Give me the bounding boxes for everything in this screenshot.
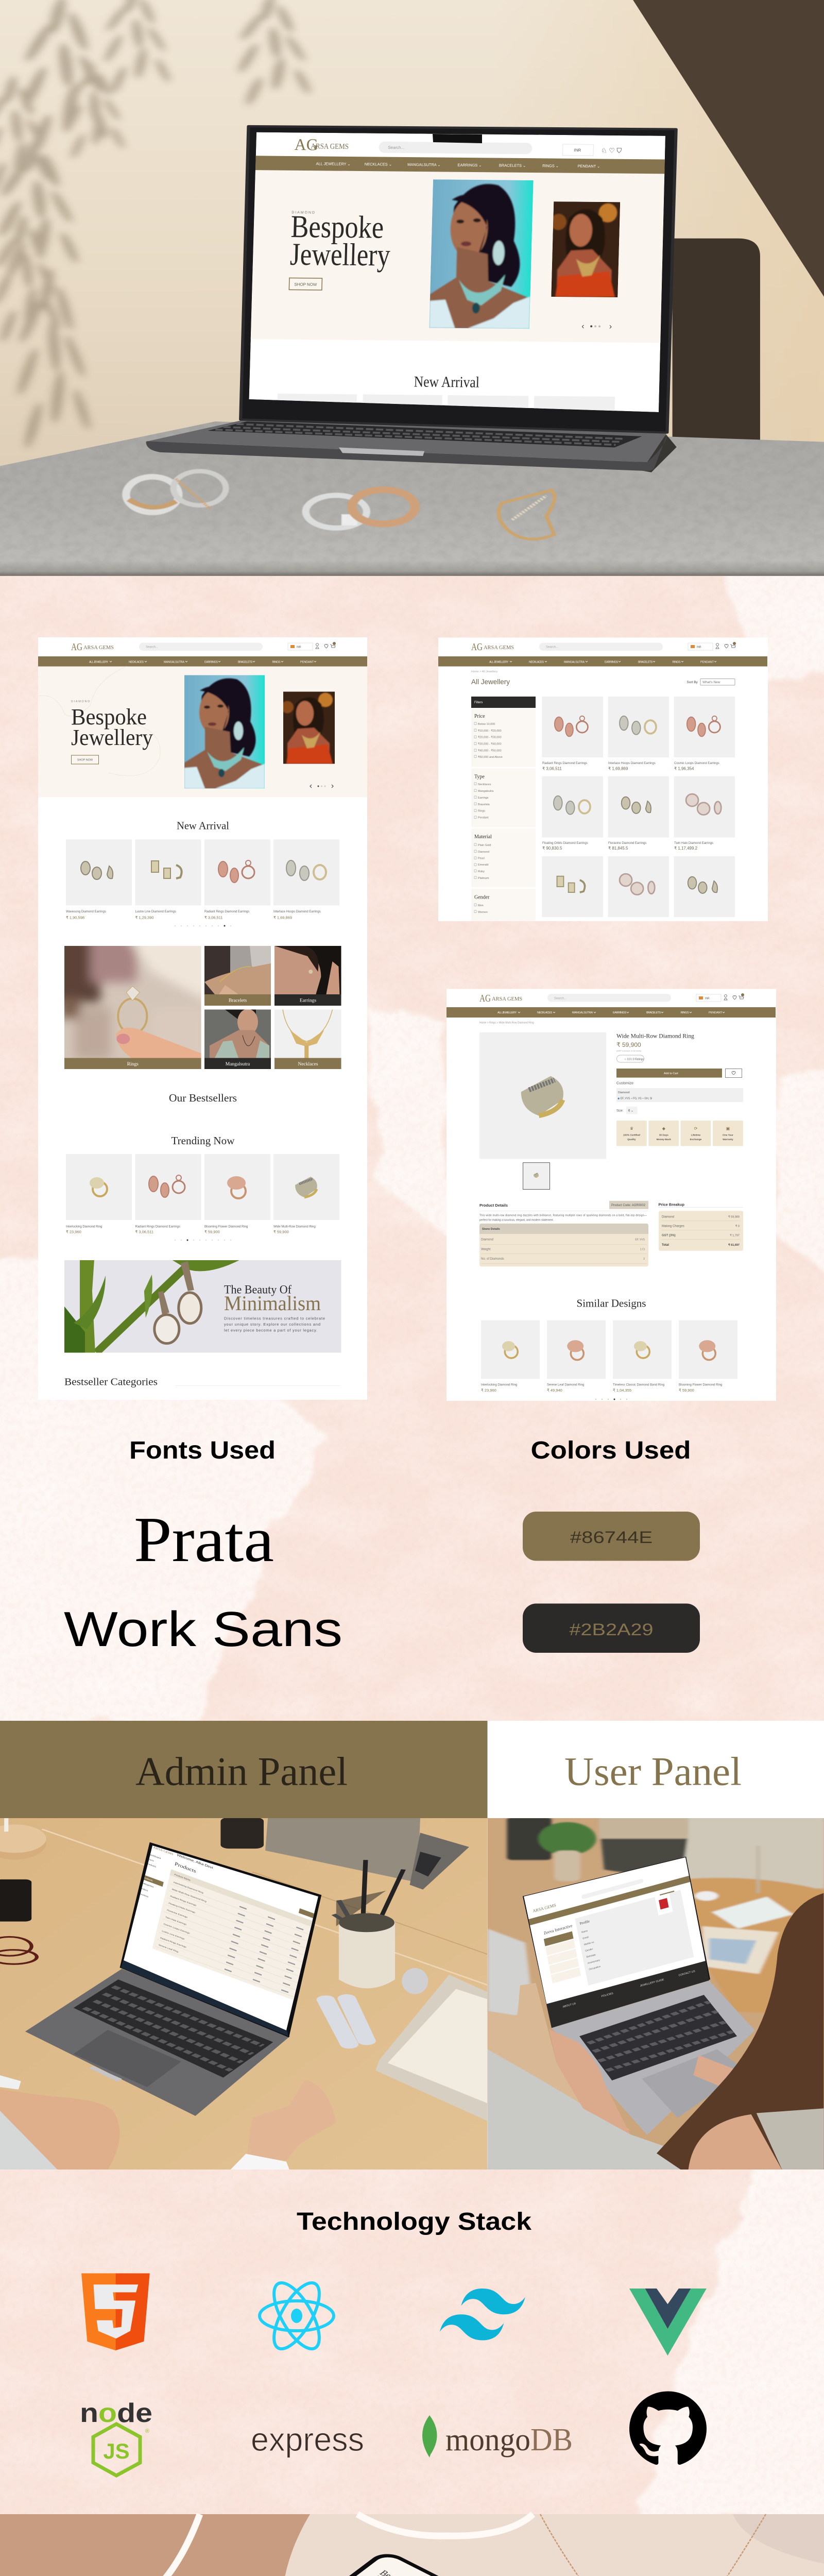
listing product grid: Cosmic Loops Diamond Earrings bbox=[674, 762, 719, 765]
new arrival products: ₹ 1,29,390 bbox=[135, 915, 154, 920]
heading: colors used: Colors Used bbox=[530, 1437, 691, 1464]
filter sidebar: Pearl bbox=[478, 857, 485, 860]
minimalism banner: Discover timeless treasures crafted to celebrate bbox=[224, 1316, 325, 1321]
logo: Node.js bbox=[80, 2398, 152, 2476]
site header: INR bbox=[297, 646, 301, 649]
filter sidebar: Type bbox=[474, 774, 485, 780]
site header: MANGALSUTRA bbox=[572, 1011, 593, 1014]
product purchase panel: Quality bbox=[627, 1138, 636, 1141]
site header: AG bbox=[71, 641, 82, 653]
similar designs heading: Similar Designs bbox=[577, 1297, 646, 1310]
logo: GitHub bbox=[629, 2392, 707, 2465]
similar designs products: Interlocking Diamond Ring bbox=[481, 1384, 517, 1387]
site header: BRACELETS bbox=[238, 660, 252, 664]
product details table: Product Details bbox=[479, 1203, 508, 1208]
laptop screen: website home: NECKLACES ⌄ bbox=[365, 162, 392, 167]
user screen content: Email bbox=[582, 1936, 589, 1940]
laptop screen: website home: INR bbox=[574, 148, 581, 152]
trending products: Wide Multi-Row Diamond Ring bbox=[273, 1225, 316, 1228]
breadcrumb and title: Home > All Jewellery bbox=[471, 670, 497, 673]
user screen content: Gender bbox=[585, 1947, 593, 1952]
product details table: Product Code: AGR0002 bbox=[611, 1204, 646, 1207]
minimalism banner: let every piece become a part of your legacy. bbox=[224, 1328, 317, 1332]
product purchase panel: ◉ EF, VVS ○ FG, VS ○ GH, SI bbox=[617, 1097, 652, 1100]
product purchase panel: Wide Multi-Row Diamond Ring bbox=[616, 1033, 694, 1040]
filter sidebar: ₹50,000 and Above bbox=[478, 755, 503, 759]
page background: watercolour bbox=[0, 567, 824, 2519]
laptop screen: website home: ARSA GEMS bbox=[311, 142, 349, 151]
site header bbox=[38, 641, 367, 667]
filter sidebar: Earrings bbox=[478, 796, 489, 800]
product purchase panel: 6 ⌄ bbox=[628, 1110, 633, 1113]
font sample: Prata: Prata bbox=[134, 1504, 274, 1575]
price breakup table: Making Charges bbox=[662, 1225, 684, 1228]
minimalism banner: The Beauty Of bbox=[224, 1283, 291, 1296]
logo: Node.js: ® bbox=[145, 2428, 149, 2434]
admin screen content: Products bbox=[174, 1861, 197, 1874]
filter sidebar: Emerald bbox=[478, 863, 488, 867]
hero banner: SHOP NOW bbox=[77, 758, 93, 761]
logo: Node.js: JS bbox=[103, 2439, 130, 2463]
similar designs products: ₹ 49,940 bbox=[547, 1388, 562, 1393]
admin screen content: Interlocking Diamond Ring bbox=[174, 1881, 204, 1894]
listing product grid: ₹ 90,830.5 bbox=[542, 846, 562, 851]
laptop screen: website home: ‹ bbox=[581, 322, 585, 331]
admin screen content: Twin Halo Earrings bbox=[165, 1916, 187, 1926]
font sample: Work Sans: Work Sans bbox=[64, 1602, 342, 1657]
product details table: EF, VVS bbox=[635, 1239, 645, 1242]
admin screen content: Product Name bbox=[174, 1873, 191, 1882]
new arrival products: ₹ 1,90,598 bbox=[66, 915, 84, 920]
logo: React bbox=[260, 2276, 334, 2355]
minimalism banner: your unique story. Explore our collections and bbox=[224, 1322, 320, 1327]
similar designs products bbox=[481, 1320, 737, 1400]
new arrival products: Radiant Rings Diamond Earrings bbox=[204, 910, 249, 913]
filter sidebar: ₹40,000 - ₹50,000 bbox=[478, 749, 502, 752]
site header: ARSA GEMS bbox=[492, 996, 522, 1002]
price breakup table: Price Breakup bbox=[658, 1202, 684, 1207]
filter sidebar: Ruby bbox=[478, 870, 485, 873]
user screen content: Name bbox=[581, 1929, 588, 1934]
product purchase panel: ₹ 59,900 bbox=[616, 1041, 641, 1048]
admin screen content: Products bbox=[143, 1876, 153, 1882]
site header: AG bbox=[479, 993, 491, 1004]
product purchase panel: One Year bbox=[723, 1133, 733, 1137]
admin screen content: Categories bbox=[141, 1882, 154, 1888]
filter sidebar: Rings bbox=[478, 810, 485, 813]
similar designs products: Timeless Classic Diamond Band Ring bbox=[613, 1384, 664, 1387]
product details table bbox=[479, 1201, 648, 1266]
logo: MongoDB: DB bbox=[530, 2422, 573, 2458]
site header: ARSA GEMS bbox=[83, 645, 114, 651]
laptop screen: website home: PENDANT ⌄ bbox=[578, 164, 600, 168]
breadcrumb and title: Sort By bbox=[687, 681, 698, 684]
user screen content: Birthdate bbox=[586, 1953, 596, 1958]
trending products: Blooming Flower Diamond Ring bbox=[204, 1225, 248, 1228]
site header: ALL JEWELLERY bbox=[497, 1011, 517, 1014]
minimalism banner bbox=[64, 1260, 341, 1353]
product purchase panel: Diamond: bbox=[618, 1091, 630, 1094]
user screen content: Zeeva Interactive bbox=[543, 1923, 573, 1936]
new arrival products: Interlace Hoops Diamond Earrings bbox=[273, 910, 321, 913]
new arrival products: ₹ 3,06,511 bbox=[204, 915, 222, 920]
breadcrumb and title bbox=[471, 670, 735, 686]
site header: BRACELETS bbox=[646, 1011, 661, 1014]
product purchase panel: Size: bbox=[616, 1110, 624, 1113]
site header: RINGS bbox=[673, 660, 681, 664]
price breakup table: ₹ 0 bbox=[735, 1224, 740, 1228]
phone mockup with website bbox=[159, 2546, 516, 2576]
site header: INR bbox=[697, 646, 701, 649]
filter sidebar: Women bbox=[478, 911, 488, 914]
breadcrumb and title: What's New bbox=[702, 681, 720, 684]
admin screen content: Dashboard bbox=[148, 1853, 161, 1859]
site header: RINGS bbox=[681, 1011, 689, 1014]
product details table: 2 bbox=[643, 1258, 645, 1261]
site header: MANGALSUTRA bbox=[564, 660, 585, 664]
laptop screen: website home: SHOP NOW bbox=[294, 282, 317, 287]
site header: NECKLACES bbox=[529, 660, 544, 664]
hero banner: Jewellery bbox=[71, 725, 153, 750]
filter sidebar: ₹10,000 - ₹20,000 bbox=[478, 729, 502, 733]
filter sidebar: Pendant bbox=[478, 816, 489, 819]
product purchase panel: (MRP Inclusive of all taxes) bbox=[616, 1049, 642, 1052]
website mockup: product detail bbox=[447, 989, 776, 1401]
product details table: perfect for making a luxurious, elegant, and modern statement. bbox=[479, 1219, 554, 1222]
site header: AG bbox=[471, 641, 483, 653]
logo: Vue bbox=[629, 2289, 707, 2355]
logo: Tailwind CSS bbox=[440, 2289, 525, 2340]
similar designs products: ₹ 23,960 bbox=[481, 1388, 496, 1393]
price breakup table: ₹ 1,797 bbox=[730, 1233, 740, 1238]
product purchase panel: Add to Cart bbox=[664, 1072, 678, 1075]
laptop screen: website home: RINGS ⌄ bbox=[542, 163, 559, 168]
website mockup: all jewellery listing bbox=[438, 638, 768, 921]
product purchase panel: 100% Certified bbox=[623, 1133, 640, 1137]
site header: Search... bbox=[546, 646, 558, 649]
category grid: Mangalsutra bbox=[226, 1062, 250, 1067]
category grid: Earrings bbox=[300, 998, 316, 1004]
listing product grid: Radiant Rings Diamond Earrings bbox=[542, 762, 587, 765]
laptop screen: website home: ALL JEWELLERY ⌄ bbox=[316, 161, 351, 166]
laptop screen: website home: ♘ ♡ ⛉ bbox=[601, 146, 622, 155]
user screen content: ARSA GEMS bbox=[533, 1903, 557, 1913]
hero banner: Bespoke bbox=[71, 704, 147, 730]
person and sofa bbox=[488, 1983, 735, 2171]
admin screen content: ARSA GEMS bbox=[153, 1846, 174, 1856]
band: admin panel title: Admin Panel bbox=[135, 1749, 348, 1794]
product purchase panel: Money-Back bbox=[657, 1138, 671, 1141]
hero banner bbox=[38, 667, 367, 798]
table bbox=[0, 421, 824, 576]
product gallery bbox=[479, 1032, 606, 1190]
price breakup table: ₹ 61,697 bbox=[728, 1243, 740, 1247]
laptop screen: website home: Jewellery bbox=[289, 237, 391, 273]
product purchase panel: Lifetime bbox=[691, 1133, 701, 1137]
product purchase panel: ⟳ bbox=[694, 1126, 698, 1131]
wall and shadows bbox=[0, 0, 824, 576]
colour swatch #2B2A29 bbox=[523, 1603, 700, 1653]
listing product grid: ₹ 1,96,354 bbox=[674, 767, 694, 771]
new arrival products bbox=[66, 839, 339, 926]
hero photo: laptop on stone table bbox=[0, 0, 824, 576]
listing product grid: ₹ 1,69,869 bbox=[608, 767, 628, 771]
filter sidebar bbox=[471, 697, 536, 921]
site header: PENDANT bbox=[300, 660, 314, 664]
product details table: Diamond bbox=[481, 1239, 493, 1242]
similar designs products: Serene Leaf Diamond Ring bbox=[547, 1384, 584, 1387]
trending products: ₹ 59,900 bbox=[204, 1229, 220, 1234]
site header: PENDANT bbox=[709, 1011, 723, 1014]
site header: EARRINGS bbox=[613, 1011, 626, 1014]
admin screen content: Lustre Line Earrings bbox=[162, 1930, 185, 1940]
band: user panel title: User Panel bbox=[564, 1749, 742, 1794]
trending products bbox=[66, 1154, 339, 1241]
new arrival products: Wavesong Diamond Earrings bbox=[66, 910, 106, 913]
site header: Search... bbox=[146, 646, 158, 649]
product purchase panel: Exchange bbox=[690, 1138, 702, 1141]
listing product grid: ₹ 81,845.5 bbox=[608, 846, 628, 851]
laptop screen: website home: BRACELETS ⌄ bbox=[499, 163, 526, 168]
price breakup table: ₹ 59,900 bbox=[728, 1215, 740, 1219]
admin screen content: Radiant Rings Earrings bbox=[160, 1937, 187, 1948]
user screen content: ABOUT US bbox=[562, 2002, 576, 2009]
site header bbox=[438, 641, 767, 667]
filter sidebar: ₹30,000 - ₹40,000 bbox=[478, 742, 502, 746]
photo: user panel on laptop on lap bbox=[488, 1818, 824, 2171]
new arrival heading: New Arrival bbox=[177, 819, 229, 832]
listing product grid: Twin Halo Diamond Earrings bbox=[674, 842, 713, 845]
listing product grid: Interlace Hoops Diamond Earrings bbox=[608, 762, 656, 765]
trending products: Interlocking Diamond Ring bbox=[66, 1225, 102, 1228]
filter sidebar: Material bbox=[474, 834, 492, 840]
filter sidebar: Men bbox=[478, 904, 484, 907]
user screen content: JEWELLERY GUIDE bbox=[640, 1978, 665, 1988]
admin screen content: Floravine Earrings bbox=[167, 1909, 188, 1919]
webcam notch bbox=[433, 134, 482, 143]
website mockup: home page bbox=[38, 637, 367, 1400]
logo: HTML5 bbox=[81, 2274, 150, 2350]
admin screen content: Reviews bbox=[139, 1892, 149, 1898]
minimalism banner: Minimalism bbox=[224, 1292, 321, 1315]
trending products: Radiant Rings Diamond Earrings bbox=[135, 1225, 180, 1228]
trending products: ₹ 59,900 bbox=[273, 1229, 289, 1234]
user screen content: Mobile no bbox=[583, 1941, 594, 1946]
admin screen content: Cosmic Loops Earrings bbox=[163, 1923, 191, 1935]
site header: RINGS bbox=[272, 660, 281, 664]
listing product grid: ₹ 3,06,511 bbox=[542, 767, 562, 771]
admin screen content: Wide Multi-Row Diamond Ring bbox=[171, 1888, 207, 1903]
product details table: 1 Ct bbox=[640, 1248, 645, 1251]
laptop screen: website home: Bespoke bbox=[290, 209, 384, 245]
similar designs products: ₹ 59,900 bbox=[679, 1388, 694, 1393]
laptop body bbox=[146, 126, 677, 472]
listing product grid: ₹ 1,17,499.2 bbox=[674, 846, 698, 851]
site header: EARRINGS bbox=[204, 660, 218, 664]
necklace with pendant bbox=[540, 2514, 766, 2576]
logo: Express: express bbox=[251, 2421, 364, 2458]
product details table: Weight bbox=[481, 1248, 491, 1251]
filter sidebar: Bracelets bbox=[478, 803, 490, 806]
price breakup table bbox=[658, 1202, 743, 1251]
site header: PENDANT bbox=[700, 660, 714, 664]
filter sidebar: Necklaces bbox=[478, 783, 491, 786]
site header: ARSA GEMS bbox=[484, 645, 514, 651]
user screen content: Occupation bbox=[589, 1965, 601, 1971]
product details table: Stone Details bbox=[482, 1228, 500, 1231]
band: user panel title bbox=[487, 1721, 824, 1819]
laptop screen: website home: Search... bbox=[388, 145, 404, 150]
hero banner: DIAMOND bbox=[71, 700, 91, 703]
admin screen content: Radiant Rings Earrings bbox=[170, 1895, 197, 1907]
site header: NECKLACES bbox=[537, 1011, 552, 1014]
our bestsellers heading: Our Bestsellers bbox=[169, 1092, 237, 1104]
trending now heading: Trending Now bbox=[171, 1134, 235, 1147]
product details table: No. of Diamonds bbox=[481, 1258, 504, 1261]
desk objects bbox=[0, 1818, 489, 2122]
laptop deck bbox=[25, 1842, 321, 2116]
product purchase panel: ▣ bbox=[726, 1126, 730, 1131]
product purchase panel: Warranty bbox=[723, 1138, 733, 1141]
breadcrumb: Home > Rings > Wide Multi-Row Diamond Ring bbox=[479, 1021, 534, 1024]
user screen content: Profile bbox=[579, 1919, 590, 1926]
site header: Search... bbox=[554, 997, 566, 1001]
logo: Node.js: node bbox=[80, 2398, 152, 2428]
product purchase panel bbox=[616, 1033, 743, 1146]
laptop screen: website home: MANGALSUTRA ⌄ bbox=[407, 162, 441, 167]
product purchase panel: ☆ 0.0 | 0 Ratings bbox=[624, 1058, 644, 1061]
colour swatch #2B2A29: #2B2A29 bbox=[570, 1620, 653, 1639]
admin screen content: Floating Orbits Earrings bbox=[168, 1902, 196, 1914]
laptop screen: website home: EARRINGS ⌄ bbox=[457, 163, 482, 167]
site header: NECKLACES bbox=[129, 660, 144, 664]
hands, hair and shoulder bbox=[549, 1893, 823, 2171]
site header: EARRINGS bbox=[605, 660, 618, 664]
blurred background bbox=[488, 1818, 824, 2016]
laptop screen: website home: DIAMOND bbox=[291, 211, 316, 215]
site header bbox=[447, 993, 776, 1018]
price breakup table: GST (3%) bbox=[662, 1234, 676, 1238]
admin screen content: Products bbox=[146, 1862, 157, 1868]
new arrival products: Lustre Line Diamond Earrings bbox=[135, 910, 176, 913]
filter sidebar: ₹20,000 - ₹30,000 bbox=[478, 736, 502, 739]
product purchase panel: Customize bbox=[616, 1082, 633, 1085]
heading: technology stack: Technology Stack bbox=[297, 2208, 531, 2235]
price breakup table: Total bbox=[662, 1244, 669, 1247]
user screen content: POLICIES bbox=[601, 1992, 614, 1998]
hands and sleeves bbox=[0, 2075, 336, 2171]
product purchase panel: ◆ bbox=[662, 1126, 666, 1131]
product purchase panel: ♛ bbox=[630, 1126, 633, 1131]
site header: INR bbox=[705, 997, 710, 1001]
trending products: ₹ 3,06,511 bbox=[135, 1229, 153, 1234]
admin screen content: Welcome, Alka Devi bbox=[177, 1853, 214, 1870]
site header: MANGALSUTRA bbox=[164, 660, 184, 664]
site header: BRACELETS bbox=[638, 660, 653, 664]
listing product grid: Floravine Diamond Earrings bbox=[608, 842, 646, 845]
colour swatch #86744E bbox=[523, 1512, 700, 1561]
category grid: Rings bbox=[127, 1062, 139, 1067]
user screen content: CONTACT US bbox=[678, 1970, 696, 1977]
category grid bbox=[54, 936, 341, 1069]
listing product grid bbox=[542, 697, 735, 917]
heading: fonts used: Fonts Used bbox=[129, 1437, 276, 1464]
admin screen content bbox=[123, 1841, 320, 2030]
bestseller categories heading: Bestseller Categories bbox=[64, 1377, 158, 1388]
logo: MongoDB: mongo bbox=[445, 2422, 530, 2458]
logo: MongoDB bbox=[422, 2415, 573, 2458]
filter sidebar: Platinum bbox=[478, 877, 489, 880]
site header: ALL JEWELLERY bbox=[89, 660, 108, 664]
laptop screen: website home bbox=[244, 132, 676, 418]
user screen content bbox=[511, 1857, 732, 2039]
admin screen content: Orders bbox=[140, 1887, 148, 1892]
filter sidebar: Gender bbox=[474, 894, 490, 901]
site header: ALL JEWELLERY bbox=[489, 660, 508, 664]
similar designs products: Blooming Flower Diamond Ring bbox=[679, 1384, 722, 1387]
bottom scene background bbox=[0, 2514, 824, 2576]
similar designs products: ₹ 1,04,355 bbox=[613, 1388, 631, 1393]
breadcrumb and title: All Jewellery bbox=[471, 678, 510, 686]
category grid: Necklaces bbox=[298, 1062, 318, 1067]
laptop screen: website home: › bbox=[609, 323, 612, 331]
photo: admin panel on laptop at desk bbox=[0, 1818, 489, 2171]
colour swatch #86744E: #86744E bbox=[570, 1528, 653, 1547]
listing product grid: Floating Orbits Diamond Earrings bbox=[542, 842, 588, 845]
laptop screen: website home: AG bbox=[294, 135, 318, 154]
new arrival products: ₹ 1,69,869 bbox=[273, 915, 292, 920]
product details table: This wide multi-row diamond ring dazzles with brilliance, featuring multiple rows of sparkling diamonds on a bold, flat-top design— bbox=[479, 1214, 647, 1217]
filter sidebar: Below 10,000 bbox=[478, 723, 495, 726]
filter sidebar: Mangalsutra bbox=[478, 790, 494, 793]
rings on table bbox=[126, 471, 555, 539]
category grid: Bracelets bbox=[229, 998, 247, 1004]
price breakup table: Diamond bbox=[662, 1216, 674, 1219]
band: admin panel title bbox=[0, 1721, 487, 1819]
admin screen content: Serene Leaf Ring bbox=[158, 1944, 179, 1953]
filter sidebar: Diamond bbox=[478, 851, 489, 854]
filter sidebar: Plain Gold bbox=[478, 844, 491, 847]
laptop deck bbox=[523, 1857, 755, 2135]
admin screen content: Users bbox=[147, 1857, 154, 1862]
laptop screen: website home: New Arrival bbox=[414, 374, 479, 391]
filter sidebar: Price bbox=[474, 714, 485, 719]
user screen content: Anniversary bbox=[588, 1959, 600, 1964]
filter sidebar: Filters bbox=[474, 701, 483, 704]
product purchase panel: 30 Days bbox=[659, 1133, 668, 1137]
trending products: ₹ 23,960 bbox=[66, 1229, 81, 1234]
